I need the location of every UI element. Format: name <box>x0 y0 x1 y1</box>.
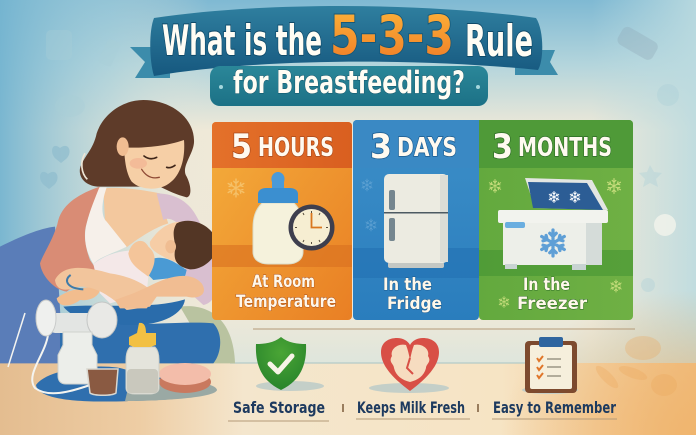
lavender sleeve <box>157 193 219 305</box>
heading: DAYS <box>397 133 457 163</box>
baby blue shirt <box>148 258 187 280</box>
icon: chest freezer <box>498 178 608 270</box>
mother's near arm <box>55 268 157 310</box>
label: Safe Storage <box>233 398 325 417</box>
label separators <box>343 404 478 412</box>
icon: milk bottle <box>253 172 303 264</box>
panel: 3 months in the freezer <box>479 120 633 320</box>
yellow bottle <box>126 347 159 394</box>
panel label <box>236 272 336 312</box>
back hair <box>80 100 194 197</box>
panel label: Temperature <box>236 292 336 312</box>
heading <box>231 127 334 167</box>
icon: clipboard <box>522 337 578 394</box>
pump tube <box>32 335 90 393</box>
subtitle text: for Breastfeeding? <box>233 65 465 101</box>
mother's legs <box>60 320 220 363</box>
hair highlight <box>82 153 87 179</box>
snowflake decoration <box>362 179 372 191</box>
floor band <box>353 248 479 278</box>
heading: 3 <box>492 127 513 167</box>
panel: 3 days in the fridge <box>353 120 479 320</box>
heading <box>370 127 457 167</box>
icon: clock <box>288 204 334 250</box>
panel header <box>479 120 633 168</box>
panel: 5 hours at room temperature <box>212 122 352 320</box>
panel label: Fridge <box>387 294 442 314</box>
underlines <box>228 329 635 421</box>
benefit: easy to remember <box>493 337 616 417</box>
pump bottle <box>58 332 97 384</box>
stray cord <box>8 313 25 367</box>
small cup <box>87 369 118 395</box>
panel label: In the <box>523 275 570 295</box>
ribbon tails <box>130 47 170 78</box>
blue cushion <box>0 227 63 363</box>
heading: HOURS <box>258 133 334 163</box>
pink disc <box>159 371 211 393</box>
pink cardigan <box>40 187 100 292</box>
mother's far arm and hand <box>115 276 204 308</box>
heading: 3 <box>370 127 392 167</box>
heading: 5 <box>231 127 252 167</box>
decorative baby icons <box>40 25 679 292</box>
watercolor leaves bottom right <box>593 336 677 396</box>
blue pillow <box>63 299 185 325</box>
icon: shield <box>256 337 324 391</box>
title rule word: Rule <box>465 16 533 67</box>
heading <box>492 127 612 167</box>
neck and chest skin <box>103 188 168 247</box>
title number: 5-3-3 <box>330 4 454 67</box>
title text: What is the <box>162 16 322 65</box>
benefit: keeps milk fresh <box>357 338 465 417</box>
breast pump and accessories <box>8 300 217 402</box>
mother's ear <box>117 137 129 156</box>
panel header <box>353 120 479 168</box>
snowflake decoration <box>489 180 501 192</box>
floor band <box>479 250 633 276</box>
panel label <box>517 275 588 314</box>
baby ear <box>165 240 176 253</box>
snowflake decoration <box>228 179 244 197</box>
baby face <box>150 222 187 267</box>
label: Keeps Milk Fresh <box>357 398 465 417</box>
benefit: safe storage <box>233 337 325 417</box>
panel label <box>383 275 442 314</box>
white top <box>85 187 127 264</box>
mother's face <box>124 140 184 189</box>
icon: fridge <box>384 174 448 268</box>
subtitle pill <box>210 66 488 106</box>
panel header <box>212 122 352 168</box>
bracelet <box>67 275 83 289</box>
illustration: mother breastfeeding <box>0 100 235 363</box>
baby feet <box>57 287 100 305</box>
mother's features <box>142 156 175 178</box>
baby body <box>93 251 148 303</box>
panel label: At Room <box>252 272 315 292</box>
baby arm <box>128 241 155 277</box>
table band <box>212 245 352 267</box>
label: Easy to Remember <box>493 398 616 417</box>
green cushion <box>180 306 235 363</box>
pill dots <box>219 85 480 89</box>
baby hair <box>174 221 217 269</box>
panel label: In the <box>383 275 432 295</box>
pump body <box>50 313 102 333</box>
panel label: Freezer <box>517 294 588 314</box>
mat shadow <box>36 366 204 402</box>
pump flange right <box>87 302 117 338</box>
pump flange left <box>36 300 56 336</box>
title banner <box>130 4 558 106</box>
ribbon body <box>150 6 542 76</box>
heading: MONTHS <box>518 133 612 163</box>
cheek <box>130 158 147 169</box>
icon: heart <box>369 338 449 393</box>
